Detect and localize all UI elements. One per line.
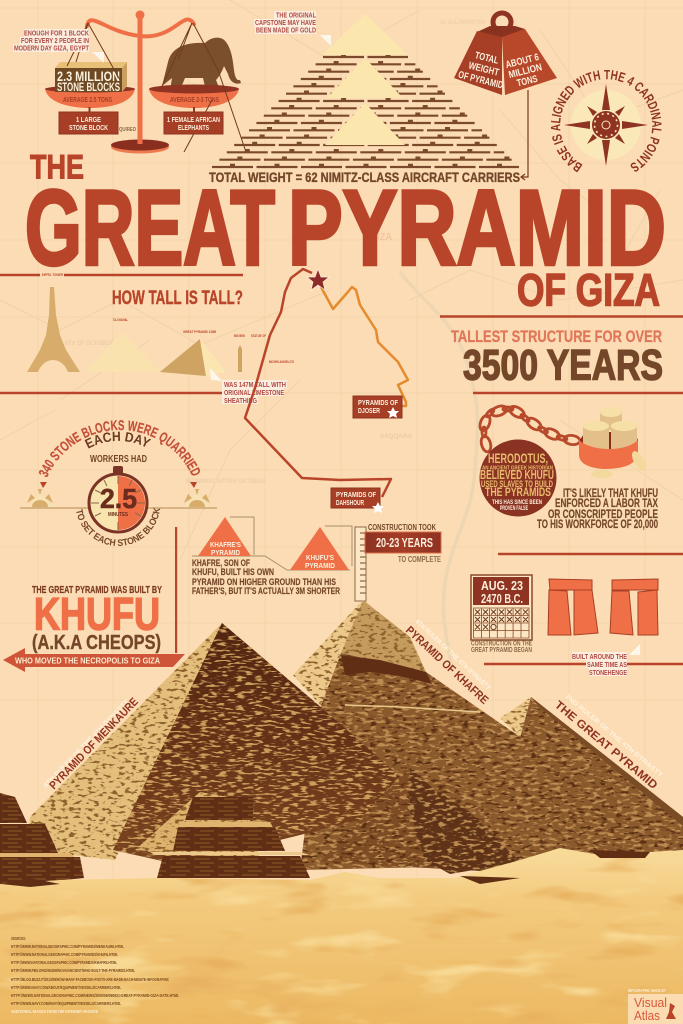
callout: capstone xyxy=(254,11,331,46)
sources: HTTP://BLOG.BUZZ.IT/2013/09/HOW-MANY-FACEBOOK-POSTS-ARE-MADE-EACH-MINUTE-INFOGRAPHIC xyxy=(11,977,170,982)
callout: stonehenge xyxy=(572,644,640,677)
label: 1 large stone block: STONE BLOCK xyxy=(69,123,108,132)
compass caption: BASE IS ALIGNED WITH THE 4 CARDINAL POINTS xyxy=(550,70,662,172)
construction took: CONSTRUCTION TOOK xyxy=(368,523,436,532)
title xyxy=(25,148,666,316)
ruler xyxy=(355,527,366,601)
panel: calendar xyxy=(471,575,532,654)
callout: stonehenge: SAME TIME AS xyxy=(587,660,627,669)
right pan: AVERAGE 2-3 TONS xyxy=(170,97,219,104)
herodotus ball: THIS HAS SINCE BEEN xyxy=(492,500,542,506)
photo: pyramids of giza xyxy=(0,600,683,1024)
carrier pyramid xyxy=(212,14,519,167)
arc arrowheads xyxy=(40,482,197,488)
herodotus ball xyxy=(480,440,556,516)
calendar grid xyxy=(474,608,529,638)
map background: SAQQARA xyxy=(380,434,413,440)
orange route xyxy=(321,287,408,406)
to set each stone block: TO SET EACH STONE BLOCK xyxy=(76,508,160,546)
sources: HTTP://WWW.NATIONALGEOGRAPHIC.COM/PYRAMIDS/KHUFU.HTML xyxy=(11,952,118,957)
label: 1 large stone block xyxy=(59,112,118,134)
label: menkaure: PYRAMID OF MENKAURE xyxy=(48,696,141,792)
left pan xyxy=(45,86,135,113)
weight icon: WEIGHT xyxy=(467,60,500,79)
stopwatch: 2.5 xyxy=(100,483,137,514)
stopwatch: MINUTES xyxy=(108,512,128,518)
height labels: EIFFEL TOWER xyxy=(42,273,63,277)
khufu: KHUFU xyxy=(34,588,160,640)
height labels: GREAT PYRAMID 139M xyxy=(183,330,216,334)
callout: 147m xyxy=(210,368,287,405)
left pan: AVERAGE 2.5 TONS xyxy=(63,97,112,104)
label: 1 large stone block: 1 LARGE xyxy=(76,115,101,124)
callout: enough for 1 block xyxy=(13,29,104,63)
20-23 years box xyxy=(365,532,441,553)
khafre text: KHAFRE, SON OF xyxy=(192,558,250,568)
title: great: GREAT xyxy=(25,168,275,288)
label: pyramids of djoser xyxy=(353,396,402,418)
callout: enough for 1 block: FOR EVERY 2 PEOPLE IN xyxy=(21,38,89,45)
khafre text: PYRAMID ON HIGHER GROUND THAN HIS xyxy=(192,577,336,587)
callout: capstone: BEEN MADE OF GOLD xyxy=(256,28,316,34)
leader arrow xyxy=(521,90,528,180)
label: great pyramid: THE GREAT PYRAMID xyxy=(552,699,659,792)
callout: enough for 1 block: ENOUGH FOR 1 BLOCK xyxy=(24,30,89,38)
map background: AL SULAMANIYEH xyxy=(440,20,485,26)
aka cheops: (A.K.A CHEOPS) xyxy=(32,632,161,654)
compass xyxy=(550,70,662,172)
stone block: 2.3 MILLION xyxy=(57,69,120,84)
elephant xyxy=(162,38,241,91)
panel: 340 stone blocks xyxy=(20,420,217,546)
carrier rows xyxy=(212,55,519,167)
weight icon: TOTAL xyxy=(474,50,500,67)
pale pyramid xyxy=(85,332,160,372)
stopwatch xyxy=(89,466,147,532)
built by: THE GREAT PYRAMID WAS BUILT BY xyxy=(32,584,162,596)
credit: visual atlas: INFOGRAPHIC MADE BY xyxy=(628,988,666,993)
calendar caption line two: GREAT PYRAMID BEGAN xyxy=(471,647,532,654)
sources: HTTP://WWW.PBS.ORG/WGBH/NOVA/ANCIENT/WHO-BUILT-THE-PYRAMIDS.HTML xyxy=(11,968,135,973)
to complete: TO COMPLETE xyxy=(398,555,441,564)
sources: HTTP://WWW.NATIONALGEOGRAPHIC.COM/PYRAMIDS/MENKAURE.HTML xyxy=(11,944,124,949)
panel: khufu and khafre xyxy=(3,517,441,672)
ground line xyxy=(20,507,217,509)
label: pyramids of dahshour: DAHSHOUR xyxy=(336,498,364,507)
scale strings xyxy=(67,23,246,152)
herodotus ball: BELIEVED KHUFU xyxy=(480,468,554,482)
label: 1 female african elephants: ELEPHANTS xyxy=(178,123,209,132)
height labels: STATUE OF xyxy=(251,334,267,338)
callout: stonehenge: BUILT AROUND THE xyxy=(572,652,627,661)
callout: enough for 1 block: MODERN DAY GIZA, EGYPT xyxy=(14,46,90,52)
limestone sheathing xyxy=(200,339,226,376)
lower triangle xyxy=(325,103,405,145)
current day xyxy=(491,624,496,630)
height labels: MICHELANGELO'S xyxy=(269,360,295,364)
stone block xyxy=(55,62,127,94)
monument xyxy=(238,345,242,372)
panel: calendar: 2470 B.C. xyxy=(481,592,523,606)
callout: capstone: THE ORIGINAL xyxy=(276,12,317,20)
map background: NIZAMIYAT SITTAH OKTOBAR xyxy=(186,479,267,485)
khufu pyramid icon: KHUFU'S xyxy=(306,555,334,562)
herodotus ball: THE PYRAMIDS xyxy=(485,485,551,499)
panel: route map xyxy=(245,269,408,513)
khafre pyramid icon: PYRAMID xyxy=(211,550,240,557)
20-23 years box: 20-23 YEARS xyxy=(376,536,433,550)
terrain line and brackets xyxy=(192,517,352,570)
herodotus ball: HERODOTUS, xyxy=(488,451,548,466)
calendar caption: CONSTRUCTION ON THE xyxy=(471,641,532,648)
heading: HOW TALL IS TALL? xyxy=(112,288,243,309)
fragment label: QUIRED xyxy=(119,127,136,133)
weight icon xyxy=(454,13,557,180)
callout: 147m: SHEATHING xyxy=(224,396,257,405)
right pan xyxy=(149,84,239,113)
height labels xyxy=(42,273,295,364)
khafre text: KHUFU, BUILT HIS OWN xyxy=(192,567,274,577)
labor tax text xyxy=(537,486,658,531)
label: pyramids of djoser: DJOSER xyxy=(358,406,380,415)
vertical rule xyxy=(175,527,177,653)
sources xyxy=(11,936,179,1014)
sun fans xyxy=(26,489,211,507)
credit: visual atlas: Visual xyxy=(634,995,667,1010)
sources: SOURCES: xyxy=(11,936,26,941)
map background: GIZA xyxy=(370,232,392,243)
stone block: STONE BLOCKS xyxy=(57,82,120,94)
callout: 147m: WAS 147M TALL WITH xyxy=(224,380,286,389)
panel: calendar: AUG. 23 xyxy=(481,578,523,593)
sources: HTTP://NEWS.NATIONALGEOGRAPHIC.COM/NEWS/2009/09/090921-GREAT-PYRAMID-GIZA-DATE.HTML xyxy=(11,993,179,998)
label: great pyramid: 2ND RULER OF THE 4TH DYNASTY xyxy=(564,693,665,779)
khafre text xyxy=(192,558,340,596)
capstone triangle xyxy=(322,14,408,55)
map background: 6TH OF OCTOBER xyxy=(65,341,114,347)
herodotus ball: USED SLAVES TO BUILD xyxy=(481,479,553,489)
sand xyxy=(0,848,683,1024)
near pyramid xyxy=(28,623,400,865)
each day: EACH DAY xyxy=(84,432,152,448)
coin bucket xyxy=(579,407,649,478)
title: the: THE xyxy=(30,148,84,186)
label: menkaure: 4TH RULER OF THE 4TH DYNASTY xyxy=(42,698,131,789)
sources: HTTP://WWW.NAVY.COM/NAVY/EQUIPMENT/VESSELS/CARRIERS.HTML xyxy=(11,1001,121,1006)
star: giza xyxy=(307,269,329,290)
great pyramid far right xyxy=(500,697,683,862)
herodotus ball: PROVEN FALSE xyxy=(500,506,528,512)
scale stand xyxy=(87,10,194,154)
callout: stonehenge: STONEHENGE xyxy=(589,668,627,677)
callout: capstone: CAPSTONE MAY HAVE xyxy=(255,20,316,27)
stonehenge xyxy=(548,579,658,635)
khafre pyramid xyxy=(293,600,640,870)
workers had: WORKERS HAD xyxy=(90,454,147,465)
eiffel tower xyxy=(27,287,80,372)
sources: HTTP://WWW.NATIONALGEOGRAPHIC.COM/PYRAMIDS/KHAFRE.HTML xyxy=(11,960,117,965)
calendar marks xyxy=(475,610,528,630)
divider lines xyxy=(0,275,683,664)
label: 1 female african elephants xyxy=(164,112,223,134)
weight icon: ABOUT 6 xyxy=(505,52,541,71)
red route xyxy=(245,269,391,497)
middle triangle xyxy=(327,58,403,98)
sources: ADDITIONAL IMAGES FROM THE INTERNET ARCHIVE xyxy=(11,1009,98,1014)
label: pyramids of djoser: PYRAMIDS OF xyxy=(358,398,398,407)
stepped tombs left xyxy=(0,793,84,884)
weight icon: MILLION xyxy=(508,62,543,81)
callout: 147m: ORIGINAL LIMESTONE xyxy=(224,388,284,397)
great pyramid silhouette xyxy=(160,339,206,376)
label: khafre: 4TH RULER OF THE 4TH DYNASTY xyxy=(414,618,492,692)
stepped tombs centre xyxy=(150,797,310,878)
chain xyxy=(478,404,581,453)
panel: tallest structure xyxy=(451,328,663,390)
label: pyramids of dahshour xyxy=(331,488,384,513)
sources: HTTP://WWW.NAVY.COM/ABOUT/EQUIPMENT/VESSELS/CARRIERS.HTML xyxy=(11,985,121,990)
total weight caption: TOTAL WEIGHT = 62 NIMITZ-CLASS AIRCRAFT CARRIERS xyxy=(209,169,520,185)
khafre pyramid icon: KHAFRE'S xyxy=(210,542,241,549)
panel: how tall is tall xyxy=(27,273,295,405)
height labels: BIG BEN xyxy=(234,334,245,338)
credit: visual atlas: Atlas xyxy=(634,1008,660,1023)
herodotus ball: AN ANCIENT GREEK HISTORIAN xyxy=(482,466,553,472)
weight icon: OF PYRAMID xyxy=(457,70,504,91)
label: 1 female african elephants: 1 FEMALE AFRICAN xyxy=(167,115,220,124)
arc text: 340 STONE BLOCKS WERE QUARRIED xyxy=(38,420,200,477)
khafre text: FATHER'S, BUT IT'S ACTUALLY 3M SHORTER xyxy=(192,586,340,596)
credit: visual atlas xyxy=(628,988,683,1024)
khufu pyramid icon: PYRAMID xyxy=(305,563,335,570)
khafre pyramid icon xyxy=(198,517,251,557)
khufu pyramid icon xyxy=(290,527,349,570)
panel: herodotus xyxy=(478,404,658,531)
arrow banner xyxy=(3,648,185,672)
subsidiary pyramid xyxy=(320,767,533,874)
scale comparing blocks and elephants xyxy=(13,10,246,154)
weight icon: TONS xyxy=(516,74,539,89)
arrow banner: WHO MOVED THE NECROPOLIS TO GIZA xyxy=(15,656,160,666)
label: pyramids of dahshour: PYRAMIDS OF xyxy=(336,490,376,499)
label: khafre: PYRAMID OF KHAFRE xyxy=(403,624,490,707)
height labels: TAJ MAHAL xyxy=(113,318,129,322)
